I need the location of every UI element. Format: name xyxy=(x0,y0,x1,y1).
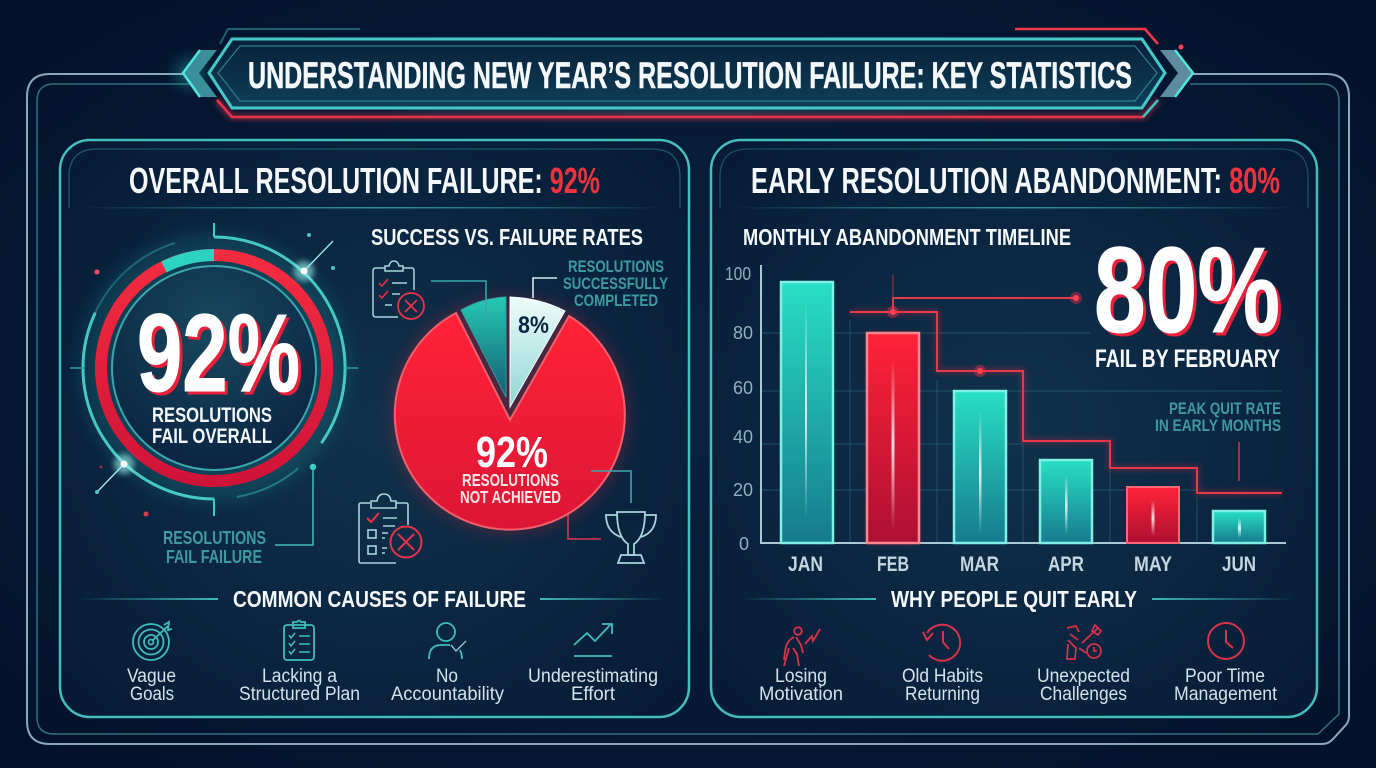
big stat caption: FAIL BY FEBRUARY xyxy=(1095,345,1280,373)
cause: vague goals: Vague xyxy=(127,666,176,687)
icon: rising chart xyxy=(574,624,612,656)
reason: old habits returning: Old Habits xyxy=(902,666,983,687)
pie label 92 percent: 92% xyxy=(476,428,548,477)
cause: lacking a structured plan: Lacking a xyxy=(262,666,337,687)
callout: successfully completed: SUCCESSFULLY xyxy=(563,274,669,293)
bar: March xyxy=(954,391,1006,543)
section heading: common causes: COMMON CAUSES OF FAILURE xyxy=(233,586,526,612)
month labels: MAY xyxy=(1134,553,1172,576)
panel: early resolution abandonment xyxy=(711,140,1317,717)
reason: unexpected challenges: Unexpected xyxy=(1037,666,1130,687)
icon: person with check xyxy=(429,623,466,659)
bar: February xyxy=(867,333,919,543)
callout: resolutions fail failure: FAIL FAILURE xyxy=(166,547,262,567)
callout: peak quit rate: PEAK QUIT RATE xyxy=(1169,399,1281,418)
ring caption: RESOLUTIONS xyxy=(152,404,272,427)
cause: no accountability: No xyxy=(436,666,458,687)
bar: April xyxy=(1040,460,1092,543)
section heading: why people quit early: WHY PEOPLE QUIT EARLY xyxy=(891,586,1137,612)
cause: vague goals xyxy=(127,622,176,705)
y axis: 60 xyxy=(733,378,753,398)
y axis xyxy=(725,264,1286,554)
y axis: 0 xyxy=(739,534,749,554)
cause: underestimating effort: Effort xyxy=(571,684,616,705)
icon: clock xyxy=(1208,623,1244,659)
pie chart: success vs failure xyxy=(392,297,628,533)
y axis: 80 xyxy=(733,323,753,343)
reason: losing motivation: Motivation xyxy=(759,684,843,705)
bar: June xyxy=(1213,511,1265,543)
y axis: 100 xyxy=(725,264,751,284)
bar: May xyxy=(1127,487,1179,543)
cause: lacking a structured plan xyxy=(239,620,360,705)
icon: obstacle with clock xyxy=(1067,625,1101,659)
cause: lacking a structured plan: Structured Plan xyxy=(239,684,360,705)
bar: January xyxy=(781,282,833,543)
pie caption: NOT ACHIEVED xyxy=(460,487,561,507)
y axis: 40 xyxy=(733,427,753,447)
reason: poor time management: Poor Time xyxy=(1185,666,1265,687)
reason: losing motivation: Losing xyxy=(775,666,827,687)
y axis: 20 xyxy=(733,480,753,500)
callout: successfully completed xyxy=(533,257,669,310)
icon: history clock xyxy=(923,625,960,661)
pie label 8 percent: 8% xyxy=(518,312,549,339)
big stat: 80 percent xyxy=(1094,222,1283,373)
icon: checklist xyxy=(284,620,314,660)
cause: vague goals: Goals xyxy=(130,684,174,705)
cause: no accountability: Accountability xyxy=(391,684,504,705)
icon: tired walker xyxy=(784,627,820,666)
month labels xyxy=(788,553,1256,576)
icon: small clipboard with cross xyxy=(373,261,486,322)
month labels: FEB xyxy=(877,553,909,576)
ring value front: 92% xyxy=(137,292,300,415)
month labels: MAR xyxy=(960,553,999,576)
icon: trophy with connectors xyxy=(568,471,656,563)
reason: poor time management xyxy=(1174,623,1278,705)
big stat front: 80% xyxy=(1094,222,1280,358)
icon: large clipboard with cross xyxy=(359,494,422,563)
pie caption: RESOLUTIONS xyxy=(462,470,559,490)
reason: old habits returning xyxy=(902,625,983,705)
month labels: JAN xyxy=(788,553,823,576)
callout: successfully completed: RESOLUTIONS xyxy=(568,257,664,276)
panel heading: OVERALL RESOLUTION FAILURE: 92% xyxy=(129,160,600,201)
month labels: JUN xyxy=(1222,553,1256,576)
callout: resolutions fail failure: RESOLUTIONS xyxy=(163,528,266,548)
bar chart: monthly abandonment xyxy=(725,264,1286,576)
callout: successfully completed: COMPLETED xyxy=(574,291,658,310)
pie heading: SUCCESS VS. FAILURE RATES xyxy=(371,224,643,250)
chart heading: MONTHLY ABANDONMENT TIMELINE xyxy=(743,224,1071,250)
reason: old habits returning: Returning xyxy=(905,684,980,705)
reason: losing motivation xyxy=(759,627,843,705)
cause: no accountability xyxy=(391,623,504,705)
cause: underestimating effort: Underestimating xyxy=(528,666,658,687)
callout: resolutions fail failure xyxy=(163,464,316,567)
reason: unexpected challenges: Challenges xyxy=(1040,684,1127,705)
red step trend line xyxy=(850,275,1282,493)
reason: poor time management: Management xyxy=(1174,684,1278,705)
month labels: APR xyxy=(1048,553,1084,576)
ring gauge: 92 percent xyxy=(70,223,358,516)
reason: unexpected challenges xyxy=(1037,625,1130,705)
ring caption: FAIL OVERALL xyxy=(152,425,272,448)
panel: overall resolution failure xyxy=(60,140,689,717)
big stat: 80 percent: 80% xyxy=(1097,225,1283,361)
callout: peak quit rate: IN EARLY MONTHS xyxy=(1155,416,1281,435)
title banner xyxy=(176,29,1193,117)
ring value: 92% xyxy=(140,295,303,418)
cause: underestimating effort xyxy=(528,624,658,705)
icon: target xyxy=(133,622,172,660)
